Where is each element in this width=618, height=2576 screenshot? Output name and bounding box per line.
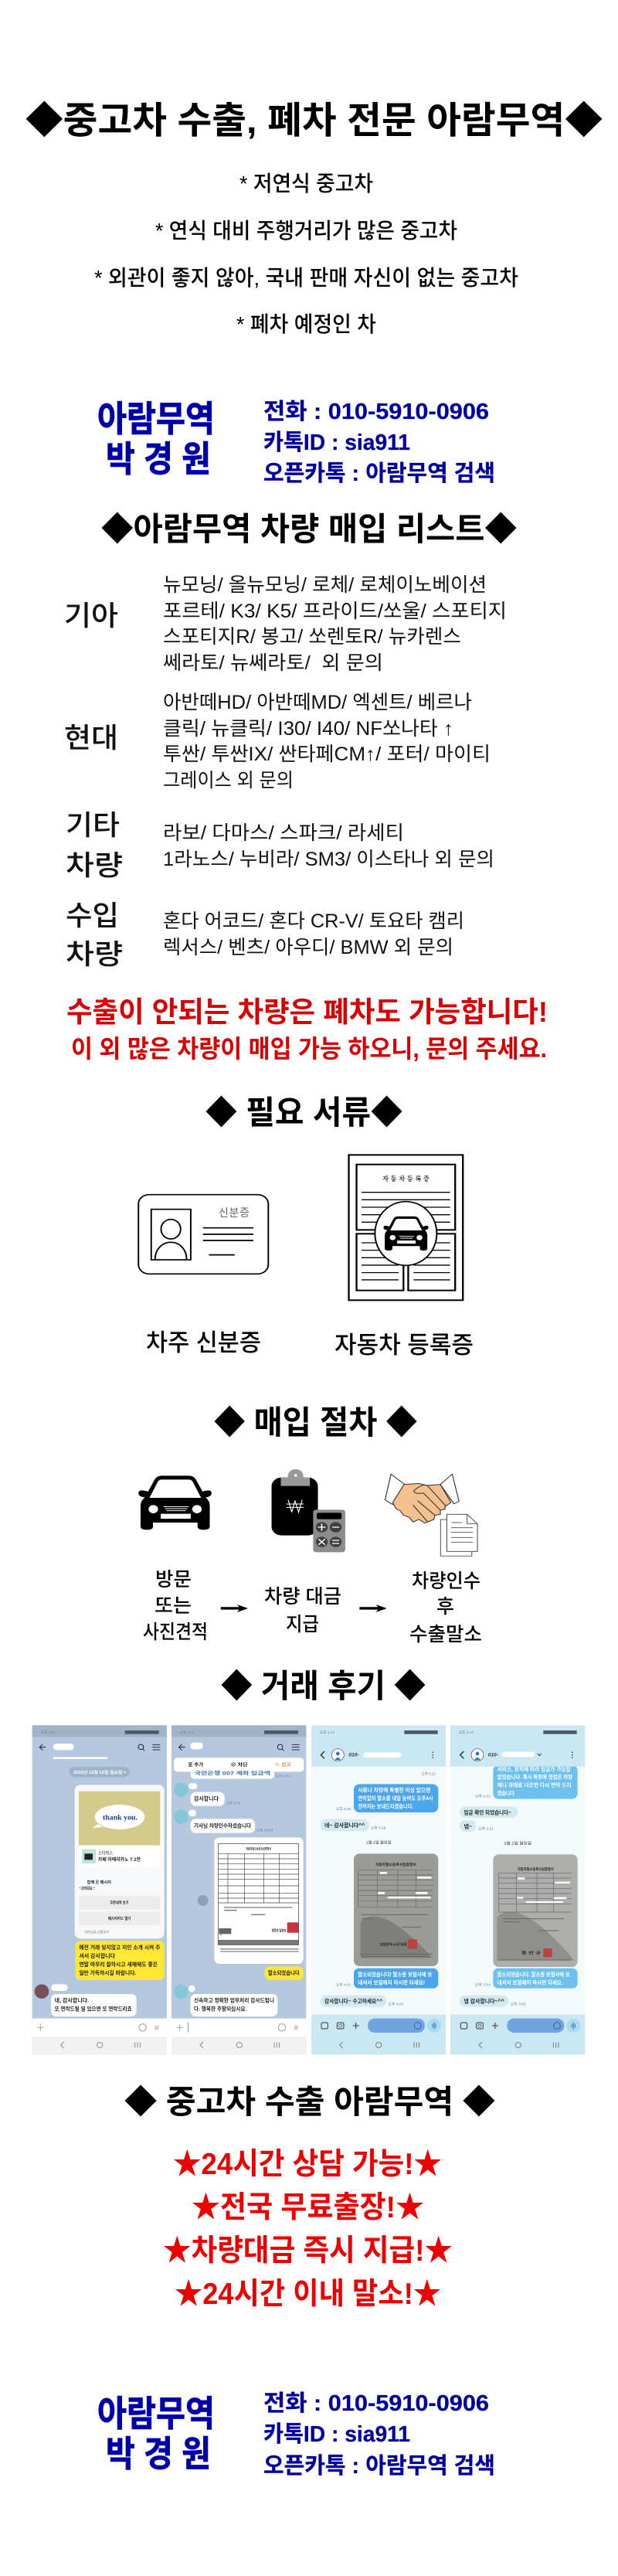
screenshot: chat 4: 오후 3:55	[511, 2002, 526, 2006]
list: other vehicles: 차량	[66, 849, 123, 881]
list: imported vehicles: 렉서스/ 벤츠/ 아우디/ BMW 외 문의	[163, 937, 453, 958]
target vehicle bullet list: * 연식 대비 주행거리가 많은 중고차	[155, 219, 457, 243]
screenshot: chat 4: 겠습니다	[497, 1789, 514, 1796]
screenshot: chat 2: 오후 4:12	[180, 1730, 195, 1735]
screenshot: chat 4: 내셔서 보험해지 하시면 되세요.	[497, 1979, 563, 1986]
contact block top: 카톡ID : sia911	[263, 430, 410, 455]
red notice: 이 외 많은 차량이 매입 가능 하오니, 문의 주세요.	[71, 1035, 547, 1063]
title: ◆중고차 수출, 폐차 전문 아람무역◆	[25, 100, 603, 141]
screenshot: chat 4: 입금 확인 되었습니다~	[464, 1809, 511, 1815]
screenshot: chat 4: 오후 4:21	[475, 1794, 491, 1798]
list: Kia: 포르테/ K3/ K5/ 프라이드/쏘울/ 스포티지	[163, 601, 507, 622]
screenshot: chat 2: 옷 추가	[188, 1761, 204, 1768]
screenshot: chat 1: 네, 감사합니다.	[55, 1997, 89, 2004]
heading: purchase procedure: ◆ 매입 절차 ◆	[214, 1404, 417, 1441]
step 1 label: 방문	[155, 1569, 192, 1591]
target vehicle bullet list: * 저연식 중고차	[239, 172, 373, 196]
screenshot: chat 1: #	[154, 2024, 159, 2033]
screenshot: chat 3	[311, 1725, 446, 2054]
screenshot: chat 4: 넵~	[464, 1822, 472, 1829]
screenshot: chat 2: 오전 10:54	[256, 1827, 273, 1832]
step 2 label: 차량 대금	[264, 1586, 341, 1608]
contact block bottom: 박 경 원	[106, 2434, 211, 2474]
screenshot: chat 4: 없었습니다. 혹시 특정에 영업은 차량	[497, 1774, 573, 1781]
target vehicle bullet list: * 외관이 좋지 않아, 국내 판매 자신이 없는 중고차	[94, 266, 518, 290]
screenshot: chat 4: 오후 4:21	[478, 1826, 494, 1831]
red notice	[66, 996, 548, 1063]
icon: vehicle registration document: 자동차등록증	[382, 1175, 430, 1183]
screenshot: chat 3: 010-	[348, 1753, 359, 1758]
screenshot: chat 4: 2월 2일 월요일	[504, 1841, 531, 1846]
step 2 label: 지급	[286, 1614, 319, 1635]
screenshot: chat 2: 감사합니다	[194, 1795, 219, 1802]
icon: clipboard and calculator	[272, 1469, 345, 1552]
screenshot: chat 1: 셔서 감사합니다	[79, 1952, 116, 1959]
screenshot: chat 3: 오후 4:01	[336, 1983, 351, 1988]
label: vehicle registration: 자동차 등록증	[334, 1332, 474, 1359]
list: other vehicles: 기타	[66, 809, 120, 841]
contact block top: 전화 : 010-5910-0906	[263, 399, 489, 424]
contact block bottom: 전화 : 010-5910-0906	[263, 2391, 489, 2416]
red star benefits	[163, 2148, 453, 2311]
screenshot: chat 4: 자동차말소등록사실증명서	[518, 1866, 554, 1872]
screenshot: chat 4: 오후 4:12	[459, 1730, 474, 1735]
screenshot: chat 2: #	[294, 2024, 298, 2033]
screenshot: chat 3: 오후 5:21	[422, 1772, 436, 1777]
list: imported vehicles: 혼다 어코드/ 혼다 CR-V/ 토요타 캠리	[163, 910, 464, 932]
heading: company: ◆ 중고차 수출 아람무역 ◆	[124, 2084, 495, 2120]
list: imported vehicles: 차량	[66, 938, 123, 970]
icon: vehicle registration document	[349, 1155, 463, 1300]
contact block top: 오픈카톡 : 아람무역 검색	[263, 461, 495, 486]
label: owner ID: 차주 신분증	[146, 1329, 261, 1356]
screenshot: chat 2: 기사님 차량인수하셨습니다	[194, 1822, 252, 1829]
screenshot: chat 2: 오전 9:10	[276, 1774, 290, 1778]
screenshot: chat 3: 내셔서 보험해지 하시면 되세요!	[358, 1979, 425, 1986]
contact block bottom: 카톡ID : sia911	[263, 2421, 410, 2447]
screenshot: chat 2	[171, 1725, 306, 2054]
screenshot: chat 1: 카페 아메리카노 T 2잔	[98, 1856, 141, 1863]
list: other vehicles	[66, 809, 494, 881]
list: Kia	[64, 574, 507, 674]
screenshot: chat 4: 넵 감사합니다~^^	[464, 1998, 504, 2005]
screenshot: chat 2: ※ 신고	[274, 1761, 291, 1768]
screenshot: chat 1: 연말 마무리 잘하시고 새해에도 좋은	[79, 1961, 158, 1968]
screenshot: chat 4: 서비스, 원칙에 따라 입금가 가능합	[497, 1765, 571, 1772]
heading: reviews: ◆ 거래 후기 ◆	[221, 1668, 426, 1704]
screenshot: chat 2: 말소되었습니다	[268, 1969, 300, 1976]
screenshot: chat 3: 전까지는 보내드리겠습니다.	[358, 1803, 413, 1810]
step 2 label	[264, 1586, 341, 1635]
screenshot: chat 3: 연락없이 말소를 내일 늦어도 오후4시	[358, 1795, 433, 1802]
icon: ID card: 신분증	[219, 1206, 250, 1219]
step 1 label	[143, 1569, 208, 1643]
step 3 label	[409, 1570, 482, 1645]
screenshot: chat 3: 서류나 차량에 특별한 이상 없으면	[358, 1787, 430, 1794]
screenshot: chat 1: 예전 거래 잊지않고 지인 소개 시켜 주	[79, 1944, 161, 1951]
screenshot: chat 4: 동 인 규	[521, 1951, 542, 1956]
screenshot: chat 1: 주문내역 보기	[110, 1901, 129, 1906]
screenshot: chat 3: 자동차말소등록사실증명서	[375, 1862, 416, 1867]
screenshot: chat 1: 메시지카드 열기	[108, 1916, 131, 1921]
list: Hyundai: 투싼/ 투싼IX/ 싼타페CM↑/ 포터/ 마이티	[163, 744, 491, 765]
screenshot: chat 2: ⊘ 차단	[231, 1761, 248, 1768]
list: other vehicles: 라보/ 다마스/ 스파크/ 라세티	[163, 822, 404, 844]
arrow 1	[221, 1604, 248, 1612]
screenshot: chat 1: 함께 온 메시지	[87, 1880, 111, 1885]
red star benefits: ★전국 무료출장!★	[192, 2191, 424, 2224]
screenshot: chat 3: 2월 2일 월요일	[366, 1840, 391, 1846]
list: Kia: 뉴모닝/ 올뉴모닝/ 로체/ 로체이노베이션	[163, 574, 487, 596]
screenshot: chat 3: 오후 4:12	[320, 1730, 334, 1735]
screenshot: chat 2: 국민은행 007 계좌 입금액	[195, 1771, 270, 1777]
list: Kia: 쎄라토/ 뉴쎄라토/ 외 문의	[163, 652, 383, 674]
screenshot: chat 1: 2022년 12월 15일 월요일 >	[73, 1769, 126, 1775]
red star benefits: ★24시간 이내 말소!★	[175, 2278, 441, 2311]
screenshot: chat 1: 오후 4:12	[41, 1730, 56, 1735]
red star benefits: ★차량대금 즉시 지급!★	[163, 2234, 453, 2268]
screenshot: chat 3: 말소되었습니다! 말소증 보험사에 보	[358, 1971, 433, 1978]
step 3 label: 차량인수	[412, 1570, 480, 1592]
screenshot: chat 1: thank you.	[103, 1814, 138, 1822]
icon: handshake and documents	[385, 1474, 477, 1556]
list: Hyundai: 현대	[64, 722, 118, 754]
icon: ID card	[138, 1195, 268, 1274]
heading: required documents: ◆ 필요 서류◆	[205, 1094, 402, 1131]
screenshot: chat 2: 신속하고 정확한 업무처리 감사드립니	[194, 1997, 274, 2004]
screenshot: chat 3: 감사합니다~ 수고하세요^^	[324, 1998, 382, 2005]
contact block top: 아람무역	[97, 399, 215, 439]
screenshot: chat 3: 네~ 감사합니다^^	[324, 1822, 365, 1829]
list: Kia: 기아	[64, 600, 118, 631]
target vehicle bullet list	[94, 172, 518, 336]
screenshot: chat 1: 일만 가득하시길 바랍니다.	[79, 1969, 136, 1976]
screenshot: chat 1: 카카오톡 선물하기	[84, 1929, 109, 1935]
contact block bottom: 아람무역	[97, 2394, 215, 2434]
contact block bottom	[97, 2391, 495, 2479]
contact block top: 박 경 원	[106, 439, 211, 479]
screenshot: chat 3: 오후 5:26	[336, 1807, 351, 1812]
list: Hyundai	[64, 692, 491, 791]
screenshot: chat 3: 오후 5:29	[371, 1826, 386, 1831]
heading: purchase list: ◆아람무역 차량 매입 리스트◆	[101, 511, 517, 547]
screenshot: chat 4: 에나 과태료 나오면 다시 연락 드리	[497, 1781, 572, 1788]
screenshot: chat 1: 스타벅스	[98, 1849, 113, 1856]
list: imported vehicles	[66, 900, 464, 970]
arrow 2	[359, 1604, 387, 1612]
step 3 label: 후	[436, 1596, 454, 1618]
list: Hyundai: 아반떼HD/ 아반떼MD/ 엑센트/ 베르나	[163, 692, 472, 713]
step 1 label: 또는	[154, 1595, 192, 1617]
screenshot: chat 4	[450, 1725, 585, 2054]
target vehicle bullet list: * 폐차 예정인 차	[236, 312, 376, 336]
contact block top	[97, 399, 495, 486]
list: imported vehicles: 수입	[66, 900, 119, 931]
screenshot: chat 2: 다. 행복한 주말되십시요.	[194, 2006, 246, 2013]
list: Hyundai: 그레이스 외 문의	[163, 770, 294, 791]
screenshot: chat 1	[32, 1725, 167, 2054]
icon: car	[138, 1475, 212, 1530]
step 3 label: 수출말소	[409, 1624, 482, 1645]
red notice: 수출이 안되는 차량은 폐차도 가능합니다!	[66, 996, 548, 1028]
step 1 label: 사진견적	[143, 1621, 208, 1643]
screenshot: chat 3: 오후 4:01	[388, 2002, 404, 2006]
screenshot: chat 2: 자동차말소등록사실증명서	[246, 1846, 271, 1851]
list: Kia: 스포티지R/ 봉고/ 쏘렌토R/ 뉴카렌스	[163, 626, 461, 648]
screenshot: chat 4: 말소되었습니다. 말소증 보험사에 보	[497, 1971, 570, 1978]
list: other vehicles: 1라노스/ 누비라/ SM3/ 이스타나 외 문의	[163, 849, 494, 870]
screenshot: chat 4: 오후 3:54	[475, 1983, 491, 1988]
screenshot: chat 2: 오전 9:10	[226, 1801, 241, 1805]
screenshot: chat 4: 010-	[488, 1753, 499, 1758]
contact block bottom: 오픈카톡 : 아람무역 검색	[263, 2453, 495, 2479]
screenshot: chat 1: 또 연락드릴 일 있으면 또 연락드리죠	[55, 2006, 132, 2013]
screenshot: chat 2: 영등포 임용진	[272, 1928, 286, 1932]
red star benefits: ★24시간 상담 가능!★	[173, 2148, 442, 2181]
screenshot: chat 3: 인천광역시서구청장	[380, 1942, 407, 1948]
screenshot: chat 1: "고마워요."	[80, 1886, 95, 1891]
list: Hyundai: 클릭/ 뉴클릭/ I30/ I40/ NF쏘나타 ↑	[163, 718, 453, 740]
